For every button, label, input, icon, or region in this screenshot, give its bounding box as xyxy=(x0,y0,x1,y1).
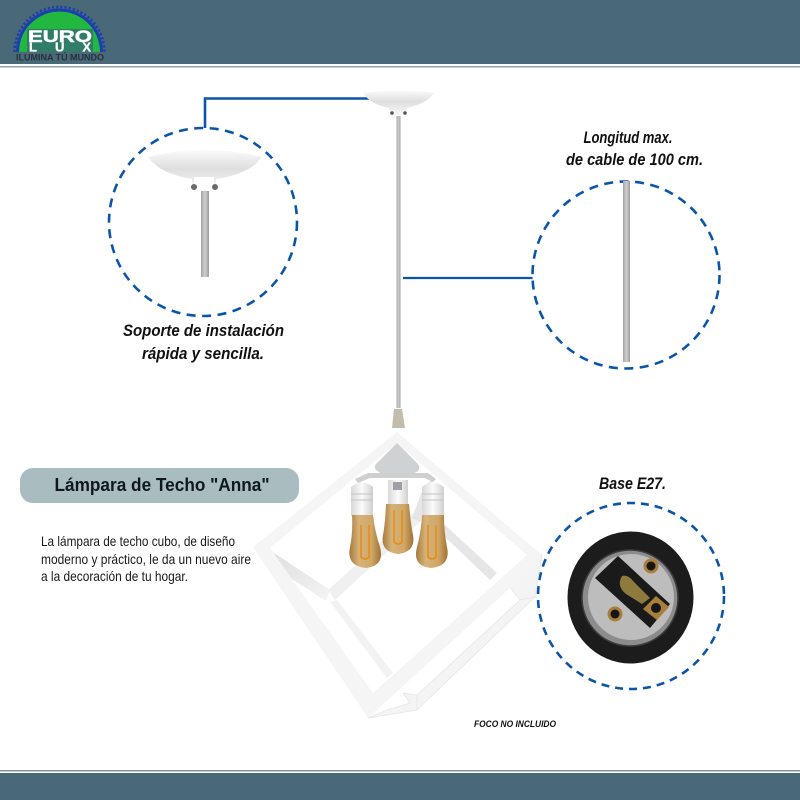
caption: cable length: Longitud max. xyxy=(584,128,672,147)
cable connector xyxy=(392,409,405,428)
right bulb xyxy=(416,515,448,568)
connector line: canopy to detail circle xyxy=(205,98,369,128)
logo: Eurolux: ILUMINA TÚ MUNDO xyxy=(16,52,104,62)
caption: cable length: de cable de 100 cm. xyxy=(566,150,703,169)
note: bulb not included: FOCO NO INCLUIDO xyxy=(474,719,557,730)
title pill xyxy=(20,468,299,503)
center socket xyxy=(388,480,408,504)
footer band xyxy=(0,770,800,800)
lamp: cube frame and bulbs xyxy=(253,432,542,718)
left socket xyxy=(351,482,373,516)
description text: La lámpara de techo cubo, de diseño xyxy=(41,533,235,549)
center bulb xyxy=(383,504,413,554)
detail circle: cable xyxy=(532,181,720,368)
title pill: Lámpara de Techo "Anna" xyxy=(54,475,270,495)
caption: base: Base E27. xyxy=(599,474,666,493)
caption: installation support xyxy=(123,321,284,363)
header band xyxy=(0,0,800,68)
cube front frame xyxy=(253,432,542,718)
detail circle: canopy xyxy=(109,128,297,316)
cube lower-right rear frame xyxy=(368,555,542,718)
logo: Eurolux: LUX xyxy=(29,40,91,54)
left bulb xyxy=(349,515,381,568)
caption: installation support: rápida y sencilla. xyxy=(142,344,264,363)
description text: moderno y práctico, le da un nuevo aire xyxy=(41,551,251,567)
pendant canopy xyxy=(363,90,434,115)
description text xyxy=(41,533,251,584)
caption: cable length xyxy=(566,128,703,169)
logo: Eurolux xyxy=(14,7,104,62)
lamp holder dome xyxy=(375,443,419,477)
right socket xyxy=(422,482,444,516)
logo: Eurolux: EURO xyxy=(28,27,92,46)
lamp arms xyxy=(355,473,436,483)
description text: a la decoración de tu hogar. xyxy=(41,568,188,584)
pendant cable xyxy=(396,116,400,408)
connector line: cable to detail circle xyxy=(403,277,533,279)
cube back struts xyxy=(262,478,497,678)
detail circle: E27 socket xyxy=(538,503,724,689)
caption: installation support: Soporte de instalación xyxy=(123,321,284,340)
